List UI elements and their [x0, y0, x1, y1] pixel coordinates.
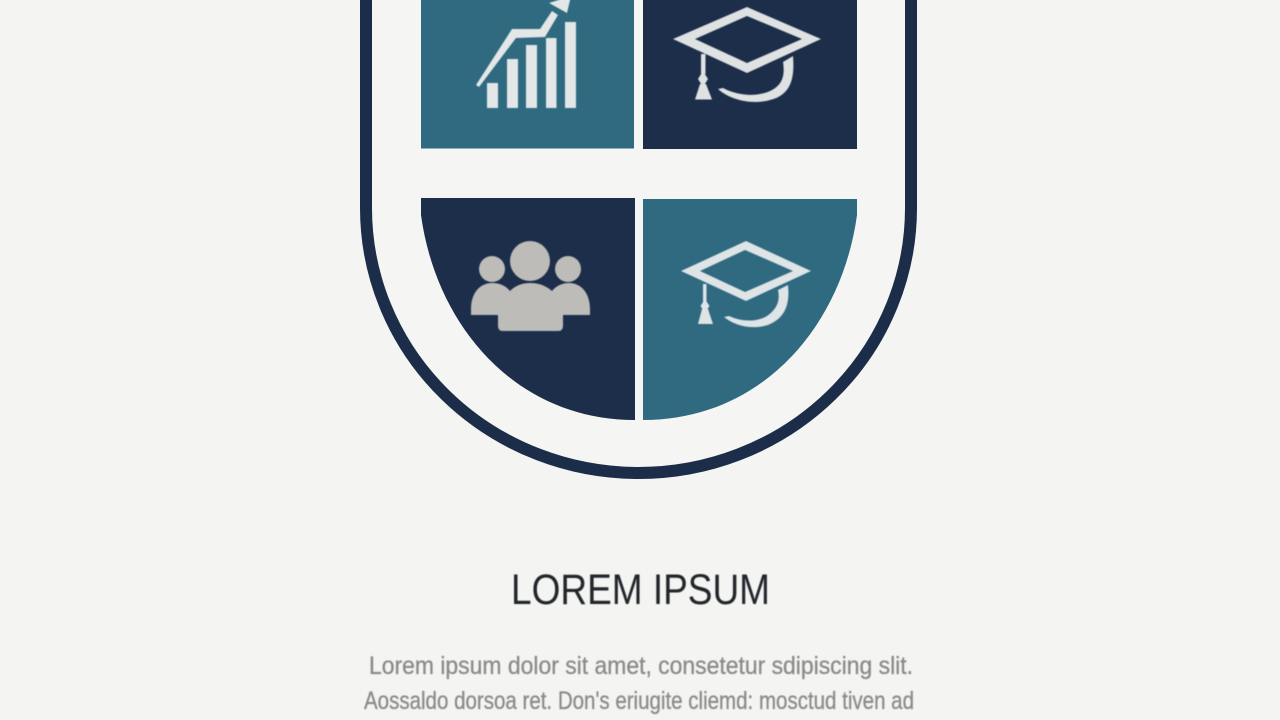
- panel: top right navy with graduation cap: [643, 0, 857, 149]
- panel: bottom right teal with graduation cap: [643, 199, 857, 420]
- shield outline: [366, 0, 911, 473]
- icon: group of people: [471, 241, 590, 331]
- icon: graduation cap: [673, 7, 821, 102]
- body text: [364, 652, 914, 715]
- shield emblem: [366, 0, 911, 473]
- title: LOREM IPSUM: [511, 566, 770, 614]
- icon: growth chart: [476, 0, 576, 108]
- panel: top left teal with growth chart: [421, 0, 634, 148]
- body text: Lorem ipsum dolor sit amet, consetetur sdipiscing slit.: [369, 652, 913, 680]
- panel: bottom left navy with people: [421, 198, 635, 420]
- body text: Aossaldo dorsoa ret. Don's eriugite cliemd: mosctud tiven ad: [364, 687, 914, 715]
- icon: graduation cap: [681, 241, 811, 327]
